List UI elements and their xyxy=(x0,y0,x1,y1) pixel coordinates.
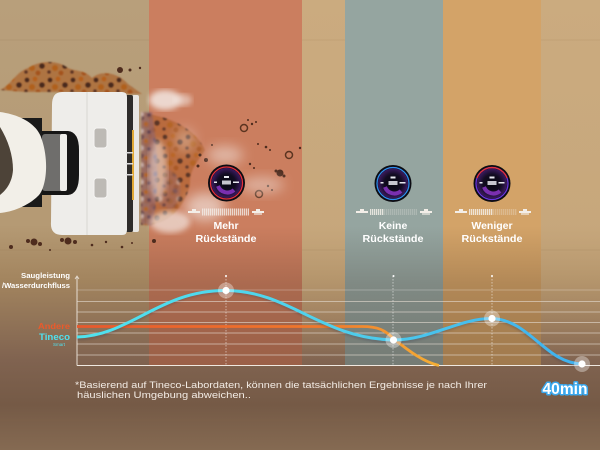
line chart xyxy=(2,271,600,372)
vacuum neck xyxy=(14,118,79,207)
gauge: Mehr Rückstände xyxy=(208,164,245,202)
slider: Weniger xyxy=(455,209,531,215)
slider: Keine xyxy=(356,209,432,215)
label: Weniger Rückstände: Rückstände xyxy=(462,233,523,245)
label: Mehr Rückstände: Rückstände xyxy=(196,233,257,245)
series label: Andere: Andere xyxy=(38,321,70,331)
band: blue grey xyxy=(345,0,443,365)
gauge: Keine Rückstände xyxy=(374,165,412,202)
marker 2 xyxy=(386,332,402,348)
label: Keine Rückstände xyxy=(362,220,424,245)
series label: Tineco Smart xyxy=(39,332,71,347)
footnote: häuslichen Umgebung abweichen.. xyxy=(77,390,251,401)
axis title xyxy=(2,271,70,290)
axis title: /Wasserdurchfluss xyxy=(2,281,70,290)
label: Keine Rückstände: Rückstände xyxy=(362,233,424,245)
slider: Mehr xyxy=(188,209,264,215)
axis title: Saugleistung xyxy=(21,271,70,280)
label: Mehr Rückstände: Mehr xyxy=(213,220,239,232)
footnote xyxy=(75,380,487,401)
vacuum cleaner xyxy=(0,92,139,235)
gauge: Weniger Rückstände xyxy=(474,165,510,202)
vacuum body xyxy=(0,112,46,213)
line: Tineco xyxy=(77,290,582,364)
curve shadow xyxy=(77,292,582,366)
time label: 40min: 40min xyxy=(542,381,588,398)
small particles xyxy=(9,67,301,251)
line: Andere xyxy=(77,326,439,366)
vacuum head xyxy=(51,92,139,235)
label: Weniger Rückstände xyxy=(462,220,523,245)
series label: Tineco Smart: Tineco xyxy=(39,332,71,342)
marker 4 xyxy=(574,356,590,372)
label: Keine Rückstände: Keine xyxy=(379,220,407,232)
band: orange xyxy=(443,0,541,365)
band: red xyxy=(149,0,302,365)
footnote: *Basierend auf Tineco-Labordaten, können die tatsächlichen Ergebnisse je nach Ihrer xyxy=(75,380,487,391)
label: Mehr Rückstände xyxy=(196,220,257,245)
smoke xyxy=(149,90,284,233)
marker 1 xyxy=(218,282,234,298)
debris: dirt in front of the vacuum xyxy=(0,62,301,251)
label: Weniger Rückstände: Weniger xyxy=(471,220,513,232)
marker 3 xyxy=(484,310,500,326)
series label: Tineco Smart: Smart xyxy=(53,342,66,347)
